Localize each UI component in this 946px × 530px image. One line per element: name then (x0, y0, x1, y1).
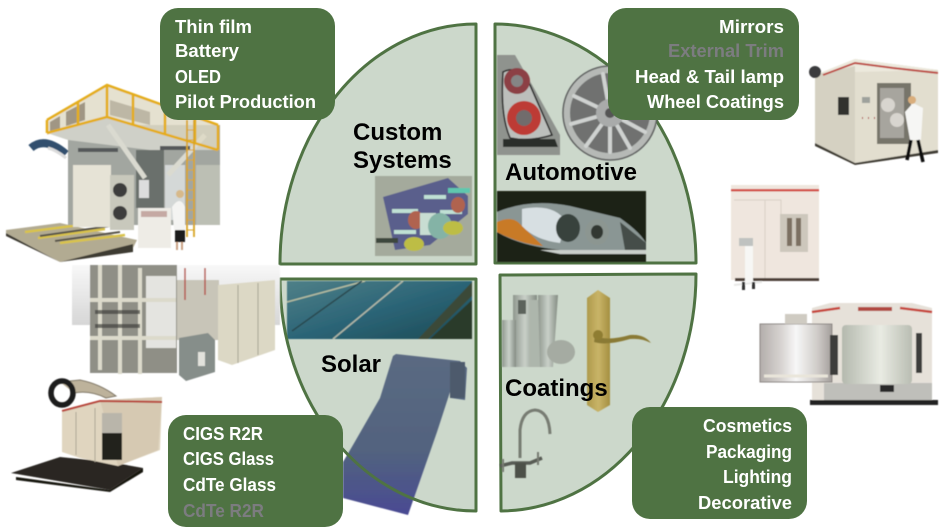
callout: Solar applications: CdTe R2R (183, 501, 264, 521)
callout: Automotive applications: External Trim (668, 41, 784, 61)
image: solar glass panels (287, 281, 472, 339)
image: alloy wheel (563, 66, 657, 160)
label: Custom Systems: Systems (353, 147, 452, 174)
label: Automotive: Automotive (505, 159, 637, 186)
image: CAD model of system (375, 176, 472, 256)
callout: Solar applications: CIGS Glass (183, 449, 274, 469)
callout: Automotive applications (608, 8, 799, 120)
callout: Solar applications: CIGS R2R (183, 424, 263, 444)
label: Coatings: Coatings (505, 375, 608, 402)
image: tail lamp (497, 55, 560, 155)
quadrant: Automotive (495, 24, 696, 263)
machine: white box coater with operator (809, 59, 938, 165)
quadrant: Custom Systems (280, 24, 476, 264)
quadrant: Coatings (500, 274, 696, 511)
machine: pilot production line with yellow platform (6, 85, 220, 262)
callout: Automotive applications: Head & Tail lamp (635, 67, 784, 87)
callout: Custom Systems applications: Battery (175, 41, 239, 61)
image: faucet (500, 410, 550, 478)
quadrant outline (280, 279, 476, 511)
machine: batch coater with open chamber (760, 303, 938, 405)
callout: Custom Systems applications: OLED (175, 67, 221, 87)
callout: Coatings applications: Cosmetics (703, 416, 792, 436)
callout: Coatings applications: Packaging (706, 442, 792, 462)
machine: roll-to-roll coater on black base (11, 380, 162, 492)
callout: Custom Systems applications (160, 8, 335, 120)
label: Solar: Solar (321, 351, 381, 378)
callout: Solar applications (168, 415, 343, 527)
quadrant: Solar (280, 279, 476, 515)
callout: Solar applications: CdTe Glass (183, 475, 276, 495)
image: headlight (497, 191, 646, 262)
callout: Coatings applications (632, 407, 807, 519)
machine: framework with cabinets (72, 265, 280, 381)
callout: Automotive applications: Mirrors (719, 17, 784, 37)
label: Custom Systems: Custom (353, 119, 442, 146)
image: cosmetic bottles (502, 295, 575, 367)
callout: Automotive applications: Wheel Coatings (647, 92, 784, 112)
callout: Coatings applications: Decorative (698, 493, 792, 513)
image: brass door handle (587, 290, 651, 412)
callout: Coatings applications: Lighting (723, 467, 792, 487)
callout: Custom Systems applications: Thin film (175, 17, 252, 37)
callout: Custom Systems applications: Pilot Production (175, 92, 316, 112)
image: flexible solar film (343, 354, 467, 515)
machine: compact coater with control stand (731, 185, 819, 290)
